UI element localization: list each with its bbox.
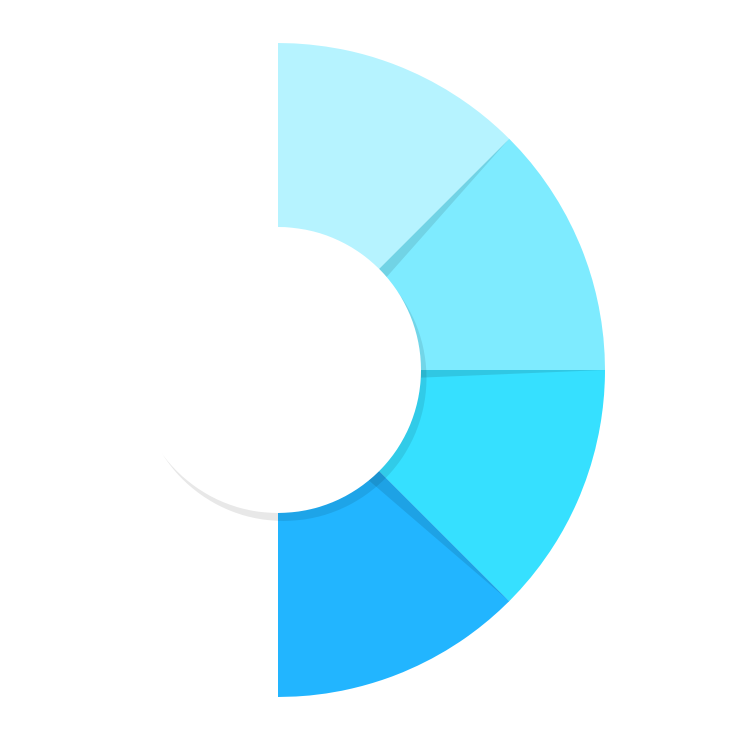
shadow: segment 2 edge [400,370,605,378]
segment 2: light cyan [278,139,605,370]
shadow: segment 1 edge [370,139,509,288]
segment 3: bright cyan [278,370,605,601]
segment 4: azure blue [278,370,509,697]
shadow: segment 3 edge [366,462,509,601]
inner circle drop shadow [140,235,426,521]
segment 1: pale blue [278,43,509,370]
inner white circle [135,227,421,513]
